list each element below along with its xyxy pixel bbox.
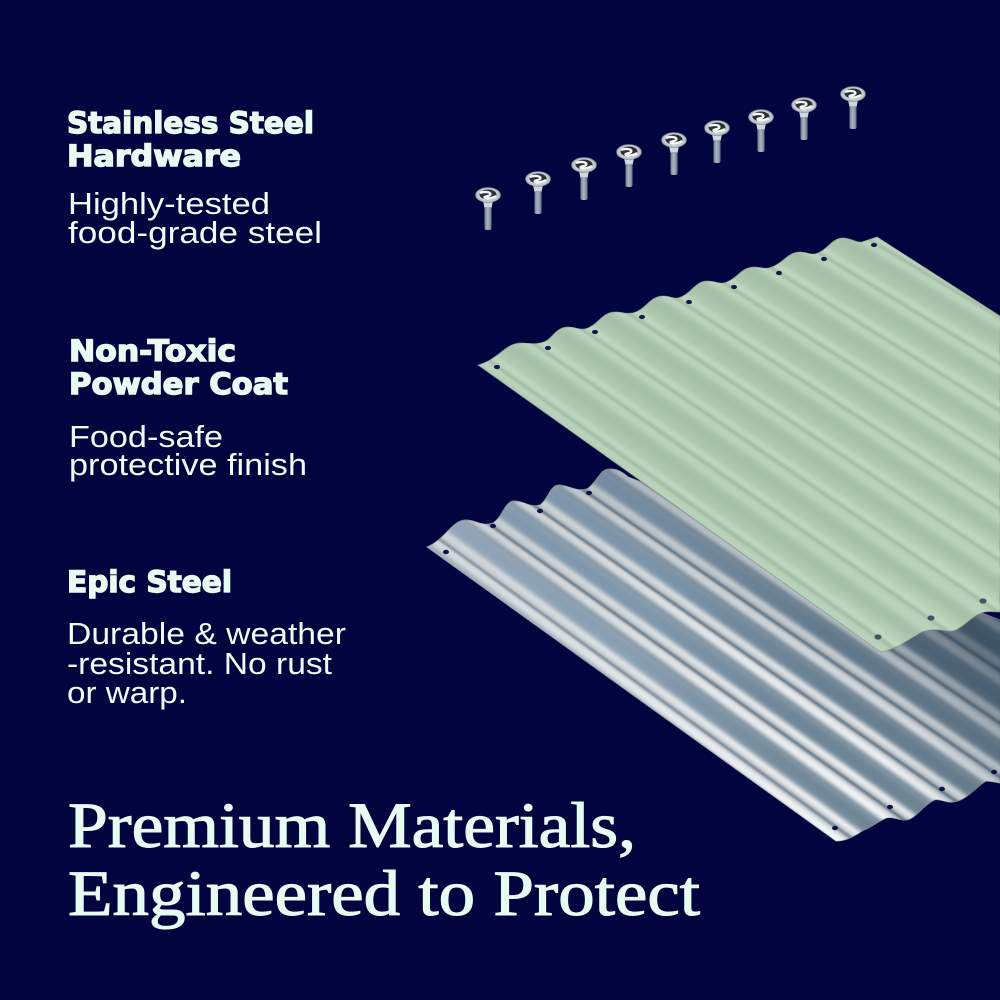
panel: stainless steel hardware text bbox=[67, 106, 322, 250]
panel: non-toxic powder coat text bbox=[69, 334, 307, 482]
sage green powder-coated sheet bbox=[477, 236, 1000, 652]
text: food-safe protective finish: Food-safe bbox=[69, 419, 223, 454]
title: Premium Materials, bbox=[68, 790, 636, 862]
text: food-safe protective finish bbox=[69, 419, 307, 482]
steel corrugated sheet bbox=[426, 468, 1000, 842]
heading: stainless steel hardware: Stainless Steel bbox=[67, 106, 314, 140]
icon: row of stainless steel screws bbox=[476, 86, 866, 230]
text: durable and weather-resistant bbox=[67, 616, 346, 710]
text: durable and weather-resistant: or warp. bbox=[67, 675, 187, 710]
text: durable and weather-resistant: -resistant. No rust bbox=[67, 646, 332, 681]
heading: stainless steel hardware: Hardware bbox=[67, 139, 241, 173]
green sheet holes bbox=[494, 243, 986, 640]
heading: non-toxic powder coat: Powder Coat bbox=[69, 367, 288, 401]
text: durable and weather-resistant: Durable & weather bbox=[67, 616, 346, 651]
text: highly-tested food-grade steel: food-grade steel bbox=[68, 215, 322, 250]
text: food-safe protective finish: protective finish bbox=[69, 447, 307, 482]
text: highly-tested food-grade steel: Highly-tested bbox=[68, 186, 270, 221]
heading: non-toxic powder coat bbox=[69, 334, 288, 401]
text: highly-tested food-grade steel bbox=[68, 186, 322, 250]
heading: stainless steel hardware bbox=[67, 106, 314, 173]
heading: epic steel: Epic Steel bbox=[67, 565, 232, 599]
title: Engineered to Protect bbox=[68, 858, 700, 930]
panel: epic steel text bbox=[67, 565, 346, 710]
heading: non-toxic powder coat: Non-Toxic bbox=[69, 334, 236, 368]
steel sheet holes bbox=[443, 491, 997, 830]
title bbox=[68, 790, 700, 930]
